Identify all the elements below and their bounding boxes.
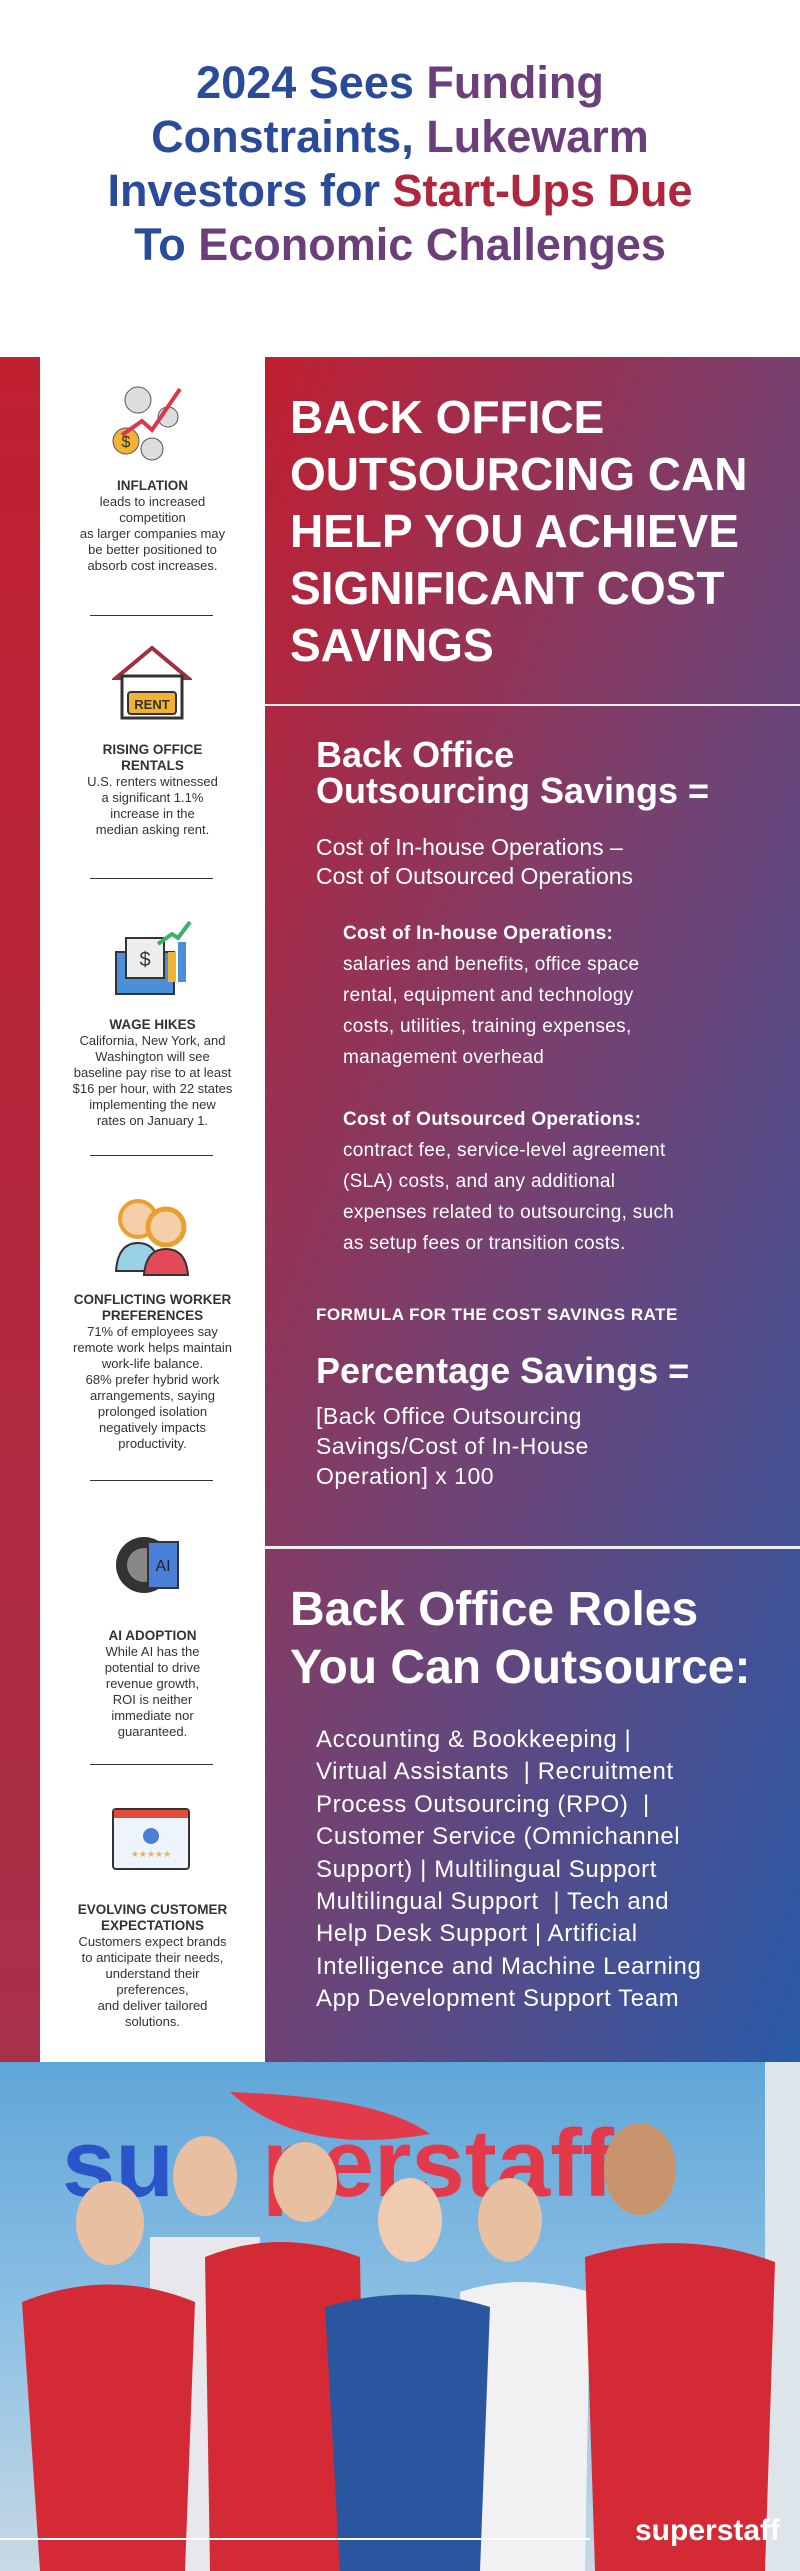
text: conflicting worker preferences: remote work helps maintain — [73, 1340, 232, 1355]
text: cost breakdown: Cost of Outsourced Operations: — [343, 1109, 641, 1130]
text: AI adoption: While AI has the — [106, 1644, 199, 1659]
text: conflicting worker preferences: arrangements, saying — [90, 1388, 215, 1403]
text: cost breakdown: (SLA) costs, and any additional — [343, 1171, 615, 1192]
text: wage hikes — [72, 1017, 232, 1128]
formula block: Cost of Outsourced Operations — [316, 863, 633, 889]
photo: team — [0, 2062, 800, 2571]
icon: customer rating: ★★★★★ — [131, 1849, 171, 1859]
list: roles: Process Outsourcing (RPO) | — [316, 1791, 650, 1818]
list: roles — [316, 1726, 701, 2012]
text: conflicting worker preferences: work-life balance. — [102, 1356, 203, 1371]
text: percentage formula: Savings/Cost of In-House — [316, 1433, 589, 1459]
text: wage hikes: California, New York, and — [80, 1033, 225, 1048]
list: roles: Multilingual Support | Tech and — [316, 1888, 669, 1915]
text: evolving customer expectations: understand their — [106, 1966, 199, 1981]
icon: rent — [112, 646, 192, 720]
text: percentage formula: [Back Office Outsourcing — [316, 1403, 582, 1429]
title: Investors for Start-Ups Due — [107, 165, 693, 216]
heading: roles: You Can Outsource: — [290, 1641, 750, 1694]
icon: wage — [115, 920, 192, 995]
text: cost breakdown: contract fee, service-level agreement — [343, 1140, 666, 1161]
text: wage hikes: baseline pay rise to at least — [74, 1065, 231, 1080]
text: rising office rentals: RISING OFFICE — [103, 742, 202, 757]
text: cost breakdown: as setup fees or transition costs. — [343, 1233, 626, 1254]
text: evolving customer expectations — [78, 1902, 227, 2029]
text: wage hikes: rates on January 1. — [97, 1113, 208, 1128]
icon: workers — [114, 1199, 190, 1276]
text: wage hikes: Washington will see — [95, 1049, 210, 1064]
text: conflicting worker preferences: CONFLICTING WORKER — [74, 1292, 231, 1307]
heading: roles: Back Office Roles — [290, 1583, 698, 1636]
list: roles: Help Desk Support | Artificial — [316, 1920, 638, 1947]
icon: customer rating — [112, 1808, 190, 1870]
text: inflation — [80, 478, 226, 573]
text: rising office rentals: a significant 1.1% — [102, 790, 203, 805]
heading: back office outsourcing: SAVINGS — [290, 619, 494, 671]
text: AI adoption: immediate nor — [111, 1708, 194, 1723]
title — [107, 57, 693, 270]
text: inflation: leads to increased — [100, 494, 205, 509]
title: To Economic Challenges — [134, 219, 666, 270]
text: cost breakdown: rental, equipment and technology — [343, 985, 634, 1006]
text: cost breakdown: management overhead — [343, 1047, 544, 1068]
text: wage hikes: implementing the new — [89, 1097, 216, 1112]
text: cost breakdown — [343, 923, 674, 1254]
text: AI adoption: ROI is neither — [113, 1692, 192, 1707]
panel: right gradient — [265, 357, 800, 2062]
text: conflicting worker preferences: prolonged isolation — [98, 1404, 207, 1419]
text: inflation: as larger companies may — [80, 526, 225, 541]
list: roles: Customer Service (Omnichannel — [316, 1823, 680, 1850]
text: percentage formula: Percentage Savings = — [316, 1350, 689, 1391]
icon: inflation — [112, 386, 182, 460]
text: evolving customer expectations: EVOLVING CUSTOMER — [78, 1902, 227, 1917]
text: wage hikes: $16 per hour, with 22 states — [73, 1081, 232, 1096]
text: inflation: be better positioned to — [88, 542, 217, 557]
text: rising office rentals — [87, 742, 218, 837]
panel: challenges column — [40, 357, 265, 2062]
text: AI adoption: revenue growth, — [106, 1676, 199, 1691]
text: conflicting worker preferences — [73, 1292, 232, 1451]
formula block: Outsourcing Savings = — [316, 770, 709, 811]
text: AI adoption: potential to drive — [105, 1660, 200, 1675]
heading: back office outsourcing: OUTSOURCING CAN — [290, 448, 747, 500]
text: evolving customer expectations: and deliver tailored — [98, 1998, 207, 2013]
text: rising office rentals: increase in the — [110, 806, 195, 821]
list: roles: Support) | Multilingual Support — [316, 1856, 657, 1883]
text: rising office rentals: U.S. renters witnessed — [87, 774, 218, 789]
text: cost breakdown: salaries and benefits, office space — [343, 954, 639, 975]
photo: team: su — [62, 2110, 174, 2217]
text: AI adoption — [105, 1628, 200, 1739]
title: Constraints, Lukewarm — [151, 111, 649, 162]
icon: AI: AI — [155, 1558, 171, 1575]
icon: wage: $ — [139, 949, 151, 971]
photo: team: perstaff — [262, 2110, 615, 2217]
icon: rent: RENT — [134, 697, 170, 712]
text: evolving customer expectations: preferences, — [116, 1982, 189, 1997]
text: evolving customer expectations: EXPECTATIONS — [101, 1918, 204, 1933]
formula block: Cost of In-house Operations – — [316, 834, 623, 860]
heading: back office outsourcing — [290, 391, 747, 671]
title: 2024 Sees Funding — [196, 57, 604, 108]
text: rising office rentals: RENTALS — [121, 758, 184, 773]
text: inflation: absorb cost increases. — [87, 558, 218, 573]
text: cost breakdown: costs, utilities, training expenses, — [343, 1016, 632, 1037]
text: cost breakdown: expenses related to outsourcing, such — [343, 1202, 674, 1223]
red strip — [0, 357, 40, 2062]
formula block — [316, 734, 709, 889]
list: roles: Accounting & Bookkeeping | — [316, 1726, 631, 1753]
text: inflation: competition — [119, 510, 186, 525]
text: evolving customer expectations: to anticipate their needs, — [82, 1950, 223, 1965]
text: AI adoption: AI ADOPTION — [108, 1628, 196, 1643]
heading: roles — [290, 1583, 750, 1694]
heading: back office outsourcing: HELP YOU ACHIEVE — [290, 505, 739, 557]
heading: back office outsourcing: BACK OFFICE — [290, 391, 604, 443]
text: conflicting worker preferences: PREFERENCES — [102, 1308, 203, 1323]
icon: AI — [116, 1537, 179, 1593]
text: wage hikes: WAGE HIKES — [109, 1017, 196, 1032]
text: conflicting worker preferences: negatively impacts — [99, 1420, 206, 1435]
text: inflation: INFLATION — [117, 478, 188, 493]
text: percentage formula: FORMULA FOR THE COST SAVINGS RATE — [316, 1305, 678, 1324]
text: evolving customer expectations: Customers expect brands — [78, 1934, 227, 1949]
heading: back office outsourcing: SIGNIFICANT COST — [290, 562, 724, 614]
text: percentage formula: Operation] x 100 — [316, 1463, 494, 1489]
list: roles: Virtual Assistants | Recruitment — [316, 1758, 674, 1785]
text: evolving customer expectations: solutions. — [125, 2014, 180, 2029]
text: conflicting worker preferences: 71% of employees say — [87, 1324, 218, 1339]
text: conflicting worker preferences: productivity. — [118, 1436, 187, 1451]
text: percentage formula — [316, 1305, 689, 1489]
formula block: Back Office — [316, 734, 514, 775]
photo: team: superstaff — [635, 2514, 781, 2547]
text: conflicting worker preferences: 68% prefer hybrid work — [86, 1372, 219, 1387]
text: cost breakdown: Cost of In-house Operations: — [343, 923, 613, 944]
text: AI adoption: guaranteed. — [118, 1724, 187, 1739]
list: roles: App Development Support Team — [316, 1985, 679, 2012]
icon: inflation: $ — [122, 434, 131, 451]
text: rising office rentals: median asking rent. — [96, 822, 209, 837]
list: roles: Intelligence and Machine Learning — [316, 1953, 701, 1980]
